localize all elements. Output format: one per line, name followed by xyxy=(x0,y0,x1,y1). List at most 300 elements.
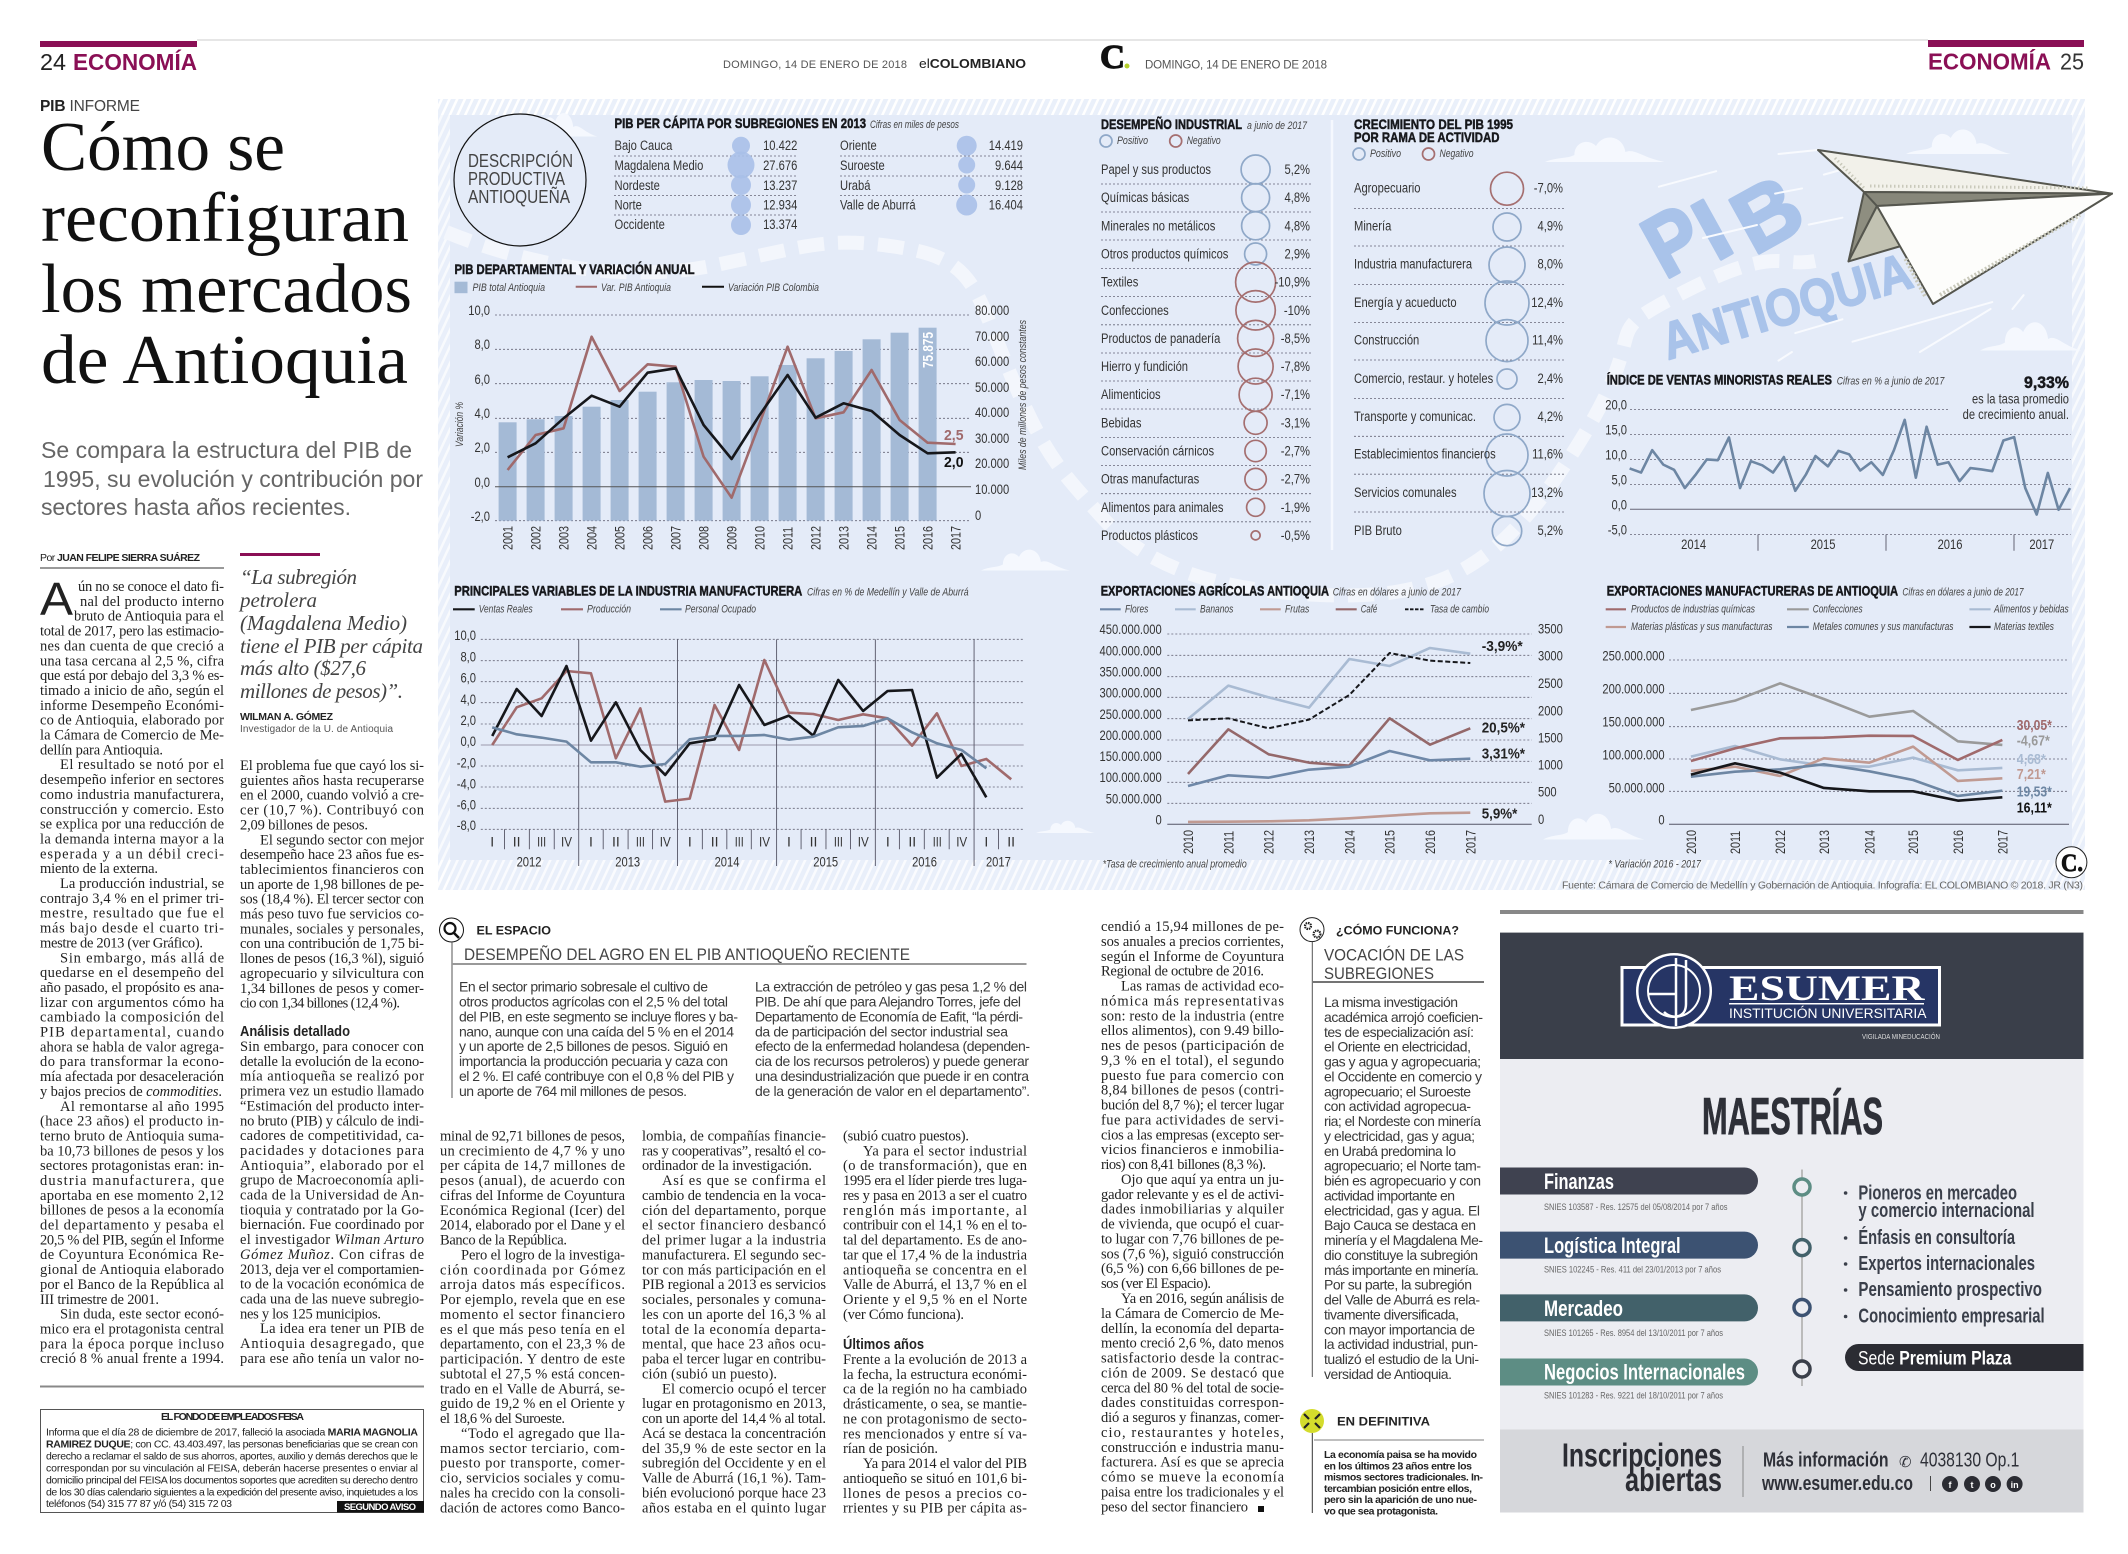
article column 2: cio con 1,34 billones (12,4 %). xyxy=(240,996,400,1012)
article column 2: con una contribución de 1,75 bi- xyxy=(240,936,424,952)
chart: Exportaciones manufactureras de Antioquia: Cifras en dólares a junio de 2017 xyxy=(1902,587,2024,599)
ad footer: 4038130 Op.1 xyxy=(1920,1450,2019,1472)
benefits list: Pioneros en mercadeo xyxy=(1858,1182,2017,1204)
chart: Exportaciones agrícolas Antioquia: Café xyxy=(1361,604,1377,616)
article column 5: Valle de Aburrá, el 13,7 % en el xyxy=(843,1277,1027,1293)
circle heading: Descripción productiva antioqueña: DESCRIPCIÓN xyxy=(468,150,573,171)
chart: Desempeño industrial: a junio de 2017 xyxy=(1247,120,1308,132)
chart: Principales variables de la industria manufacturera: 0,0 xyxy=(460,734,476,749)
chart: Crecimiento del PIB 1995 por rama de actividad: Negativo xyxy=(1440,148,1474,160)
article column 1: como industria manufacturera, xyxy=(40,787,224,803)
chart: Principales variables de la industria manufacturera: III xyxy=(735,834,744,850)
article column 2: 1,34 billones de pesos y comer- xyxy=(240,981,424,997)
section: El Espacio: efecto de la enfermedad holandesa (dependen- xyxy=(755,1038,1030,1054)
section: En definitiva: La economía paisa se ha movido xyxy=(1324,1449,1477,1461)
chart: Índice de ventas minoristas reales: 2017 xyxy=(2029,537,2054,552)
chart: Crecimiento del PIB 1995 por rama de actividad: 13,2% xyxy=(1531,485,1563,500)
article column 5: Oriente y el 9,5 % en el Norte xyxy=(843,1292,1027,1308)
section: El Espacio: importancia la producción pecuaria y caza con xyxy=(459,1053,728,1069)
chart: Exportaciones manufactureras de Antioquia: Materias plásticas y sus manufacturas xyxy=(1631,621,1773,633)
ad footer: in xyxy=(2011,1480,2019,1490)
chart: Exportaciones manufactureras de Antioquia: 16,11* xyxy=(2017,799,2052,816)
chart: Exportaciones agrícolas Antioquia: 2000 xyxy=(1538,703,1563,719)
article column 1: nal del producto interno xyxy=(80,594,224,610)
chart: Exportaciones agrícolas Antioquia: 400.000.000 xyxy=(1100,643,1162,659)
ad footer: Inscripciones xyxy=(1562,1436,1722,1474)
section: El Espacio xyxy=(440,918,1033,1099)
article column 6: mento creció 2,6 %, dato menos xyxy=(1101,1336,1284,1352)
chart: Desempeño industrial: -7,1% xyxy=(1281,387,1310,403)
article column 5 continued: llones de pesos a precios co- xyxy=(843,1486,1027,1502)
chart: PIB per cápita por subregiones: Nordeste xyxy=(614,178,660,193)
chart: Crecimiento del PIB 1995 por rama de actividad xyxy=(1353,116,1564,546)
circle heading: Descripción productiva antioqueña: ANTIOQUEÑA xyxy=(468,186,570,207)
article column 5 continued: ne con protagonismo de secto- xyxy=(843,1411,1027,1427)
article column 1: mía afectada por desaceleración xyxy=(40,1069,225,1085)
article column 1: PIB departamental, cuando xyxy=(40,1025,224,1041)
article column 3: Por ejemplo, revela que en ese xyxy=(440,1292,625,1308)
chart: Principales variables de la industria manufacturera: 2013 xyxy=(615,855,640,870)
chart: Crecimiento del PIB 1995 por rama de actividad: Energía y acueducto xyxy=(1354,295,1457,310)
chart: Desempeño industrial: -0,5% xyxy=(1281,528,1310,543)
chart: Crecimiento del PIB 1995 por rama de actividad: -7,0% xyxy=(1534,180,1563,196)
program pills: SNIES 102245 - Res. 411 del 23/01/2013 por 7 años xyxy=(1544,1265,1721,1276)
article column 3: “Todo el agregado que lla- xyxy=(461,1426,625,1442)
article column 5: Ya para el sector industrial xyxy=(863,1143,1027,1159)
section: Cómo funciona: y electricidad, gas y agua; xyxy=(1324,1128,1475,1144)
chart: Exportaciones manufactureras de Antioquia: 2011 xyxy=(1728,831,1743,854)
subheading: Se compara la estructura del PIB de xyxy=(41,437,412,463)
chart: Exportaciones manufactureras de Antioquia: 7,21* xyxy=(2017,766,2046,783)
article column 3: 2014, elaborado por el Dane y el xyxy=(440,1218,625,1234)
article column 4: cambio de tendencia en la voca- xyxy=(642,1188,826,1204)
byline: Por JUAN FELIPE SIERRA SUÁREZ xyxy=(40,551,201,564)
chart: Principales variables de la industria manufacturera: II xyxy=(612,834,620,850)
article column 5 continued: Ya para 2014 el valor del PIB xyxy=(863,1456,1027,1472)
chart: Exportaciones agrícolas Antioquia: 2016 xyxy=(1423,830,1438,854)
article column 1: ba 10,73 billones de pesos y los xyxy=(40,1143,224,1159)
section: El Espacio: otros productos agrícolas con el 2,5 % del total xyxy=(459,994,728,1010)
page header: left page: DOMINGO, 14 DE ENERO DE 2018 xyxy=(723,59,907,71)
article column 1: una tasa cercana al 2,5 %, cifra xyxy=(40,653,225,669)
chart: Desempeño industrial: -2,7% xyxy=(1281,443,1310,459)
chart: Exportaciones agrícolas Antioquia: 1500 xyxy=(1538,730,1563,746)
chart: PIB departamental y variación anual: 2010 xyxy=(752,526,768,550)
section: El Espacio: PIB. De ahí que para Alejandro Torres, jefe del xyxy=(755,994,1021,1010)
chart: Desempeño industrial: Alimenticios xyxy=(1101,387,1161,403)
chart: Crecimiento del PIB 1995 por rama de actividad: 12,4% xyxy=(1531,295,1563,310)
article column 3: puesto por transporte, comer- xyxy=(440,1456,625,1472)
chart: Exportaciones agrícolas Antioquia: 200.000.000 xyxy=(1100,728,1162,743)
chart: Exportaciones manufactureras de Antioquia: 250.000.000 xyxy=(1602,649,1665,664)
chart: PIB departamental y variación anual: 80.000 xyxy=(975,303,1009,318)
chart: Desempeño industrial: DESEMPEÑO INDUSTRIAL xyxy=(1101,115,1242,132)
chart: PIB per cápita por subregiones: Occidente xyxy=(614,217,665,232)
ad footer: Más información xyxy=(1763,1450,1888,1472)
article column 2: cer (10,7 %). Contribuyó con xyxy=(240,803,425,819)
chart: Crecimiento del PIB 1995 por rama de actividad: Establecimientos financieros xyxy=(1354,447,1496,462)
page header: right page: 25 xyxy=(2060,48,2084,74)
chart: Principales variables de la industria manufacturera: -2,0 xyxy=(457,755,476,771)
source credit: Fuente: Cámara de Comercio de Medellín y Gobernación de Antioquia. Infografía: EL COLOMBIANO © 2018. JR (N3) xyxy=(1562,879,2083,891)
section: El Espacio: cia de los recursos petroleros) y puede generar xyxy=(755,1053,1029,1069)
chart: Crecimiento del PIB 1995 por rama de actividad: Minería xyxy=(1354,218,1392,234)
article column 1: La producción industrial, se xyxy=(60,876,224,892)
chart: PIB departamental y variación anual: -2,0 xyxy=(471,509,490,524)
article column 2 continued: no bruto (PIB) y cálculo de indi- xyxy=(240,1113,424,1129)
article column 1: Al remontarse al año 1995 xyxy=(60,1099,224,1115)
chart: Exportaciones agrícolas Antioquia: 2012 xyxy=(1261,830,1277,854)
chart: Crecimiento del PIB 1995 por rama de actividad: 11,6% xyxy=(1532,447,1563,462)
article column 1: III trimestre de 2001. xyxy=(40,1292,159,1308)
article column 6: nes de pesos (participación de xyxy=(1101,1038,1284,1054)
chart: Exportaciones agrícolas Antioquia: Cifras en dólares a junio de 2017 xyxy=(1333,587,1462,599)
article column 6: Las ramas de actividad eco- xyxy=(1121,979,1284,995)
chart: PIB departamental y variación anual: 70.000 xyxy=(975,329,1009,344)
title xyxy=(41,109,412,399)
chart: PIB per cápita por subregiones: PIB PER CÁPITA POR SUBREGIONES EN 2013 xyxy=(614,115,866,131)
chart: Crecimiento del PIB 1995 por rama de actividad: Agropecuario xyxy=(1354,180,1421,196)
article column 5 continued: drásticamente, o sea, se mantie- xyxy=(843,1397,1027,1413)
title: Cómo se xyxy=(41,109,285,186)
chart: Crecimiento del PIB 1995 por rama de actividad: Construcción xyxy=(1354,333,1419,348)
article column 2 continued: cada una de las nueve subregio- xyxy=(240,1291,424,1307)
article column 1: total de 2017, pero las estimacio- xyxy=(40,624,224,640)
chart: Exportaciones manufactureras de Antioquia: 100.000.000 xyxy=(1602,747,1665,763)
chart: Desempeño industrial: -8,5% xyxy=(1281,331,1310,346)
chart: PIB departamental y variación anual: 2,5 xyxy=(944,427,964,444)
article column 6: nómica más representativas xyxy=(1101,993,1284,1009)
article column 1: creció 8 % anual frente a 1994. xyxy=(40,1351,224,1367)
chart: PIB per cápita por subregiones: 9.644 xyxy=(995,158,1023,173)
article column 2 continued: nes y los 125 municipios. xyxy=(240,1306,381,1322)
chart: Exportaciones manufactureras de Antioquia: 19,53* xyxy=(2017,784,2052,801)
article column 3: guido de 19,2 % en el Oriente y xyxy=(440,1396,626,1412)
chart: Desempeño industrial: Bebidas xyxy=(1101,415,1141,431)
section: El Espacio: La extracción de petróleo y gas pesa 1,2 % del xyxy=(755,979,1027,995)
title: de Antioquia xyxy=(41,322,408,399)
chart: PIB departamental y variación anual: 20.000 xyxy=(975,456,1009,471)
chart: Desempeño industrial: -10% xyxy=(1284,303,1310,318)
chart: PIB per cápita por subregiones: Valle de Aburrá xyxy=(840,197,916,213)
chart: Crecimiento del PIB 1995 por rama de actividad: 4,2% xyxy=(1538,409,1563,424)
chart: Desempeño industrial: 2,9% xyxy=(1285,246,1310,262)
article column 1: terno bruto de Antioquia suma- xyxy=(40,1128,224,1144)
article column 4: mental, que hace 23 años ocu- xyxy=(642,1337,826,1353)
chart: PIB departamental y variación anual: 2012 xyxy=(808,526,824,550)
section: Cómo funciona: tivamente diversificada, xyxy=(1324,1306,1459,1322)
page header: right page xyxy=(1928,40,2084,74)
section: Cómo funciona: tes de especialización así: xyxy=(1324,1024,1474,1040)
section: Cómo funciona: más importante en minería. xyxy=(1324,1262,1479,1278)
chart: Principales variables de la industria manufacturera: 4,0 xyxy=(460,692,476,707)
icon: magnifier xyxy=(440,918,464,942)
article column 6: según el Informe de Coyuntura xyxy=(1101,949,1285,965)
chart: Desempeño industrial: -1,9% xyxy=(1281,500,1310,515)
article column 3: dación de actores como Banco- xyxy=(440,1500,625,1516)
chart: PIB departamental y variación anual: 6,0 xyxy=(474,372,490,387)
section: Cómo funciona: VOCACIÓN DE LAS xyxy=(1324,946,1464,965)
article column 1: contrajo 3,4 % en el primer tri- xyxy=(40,891,224,907)
logo: circular C stamp xyxy=(2056,847,2087,878)
chart: Exportaciones agrícolas Antioquia: 3500 xyxy=(1538,621,1563,637)
chart: Exportaciones agrícolas Antioquia: 0 xyxy=(1155,812,1162,828)
section: Cómo funciona: tualizó el estudio de la Uni- xyxy=(1324,1351,1479,1367)
section: Cómo funciona: el Occidente en comercio y xyxy=(1324,1068,1482,1084)
chart: PIB departamental y variación anual: Miles de millones de pesos constantes xyxy=(1017,320,1029,470)
chart: Principales variables de la industria manufacturera: 2,0 xyxy=(460,713,476,728)
pull quote: “La subregión xyxy=(240,565,357,589)
article column 3: pesos (anual), de acuerdo con xyxy=(440,1173,626,1189)
section: En definitiva: pero sin la aparición de uno nue- xyxy=(1324,1494,1478,1506)
chart: Índice de ventas minoristas reales: 2015 xyxy=(1811,537,1835,552)
subheading: Últimos años: Últimos años xyxy=(843,1335,924,1353)
article column 4: del primer lugar a la industria xyxy=(642,1233,827,1249)
section: En definitiva xyxy=(1300,1409,1484,1518)
article column 2: guientes años hasta recuperarse xyxy=(240,773,424,789)
article column 6: 8,84 billones de pesos (contri- xyxy=(1101,1083,1284,1099)
chart: Exportaciones agrícolas Antioquia: 350.000.000 xyxy=(1100,664,1162,680)
ad footer: abiertas xyxy=(1625,1461,1722,1498)
chart: Crecimiento del PIB 1995 por rama de actividad: 5,2% xyxy=(1538,523,1563,538)
chart: PIB departamental y variación anual: 2001 xyxy=(500,526,516,550)
chart: PIB departamental y variación anual: 2009 xyxy=(724,526,740,550)
article column 5: contribuir con el 14,1 % en el to- xyxy=(843,1218,1027,1234)
chart: Desempeño industrial: -3,1% xyxy=(1281,415,1310,431)
article column 2 continued: to de la vocación económica de xyxy=(240,1277,424,1293)
chart: PIB departamental y variación anual: 10.000 xyxy=(975,482,1009,497)
chart: PIB departamental y variación anual: PIB total Antioquia xyxy=(472,282,545,294)
article column 4: sociales, personales y comuna- xyxy=(642,1292,826,1308)
chart: Índice de ventas minoristas reales: 9,33% xyxy=(2024,373,2069,392)
section: El Espacio: una desindustrialización que puede ir en contra xyxy=(755,1068,1029,1084)
section: El Espacio: el 2 %. El café contribuye con el 0,8 % del PIB y xyxy=(459,1068,734,1084)
chart: Exportaciones manufactureras de Antioquia: 30,05* xyxy=(2017,717,2052,734)
chart: PIB per cápita por subregiones: 12.934 xyxy=(763,197,797,213)
campus bar: Sede Premium Plaza xyxy=(1858,1349,2012,1370)
article column 3: Pero el logro de la investiga- xyxy=(461,1247,625,1263)
article column 3: Económica Regional (Icer) del xyxy=(440,1203,625,1219)
chart: Exportaciones manufactureras de Antioquia: Productos de industrias químicas xyxy=(1631,604,1755,616)
chart: Principales variables de la industria manufacturera: I xyxy=(688,834,692,850)
article column 3: Banco de la República. xyxy=(440,1233,567,1249)
program pills: Mercadeo xyxy=(1544,1296,1623,1321)
article column 5 continued: rrientes y su PIB per cápita as- xyxy=(843,1501,1027,1517)
article column 4: les con un aporte del 16,3 % al xyxy=(642,1307,826,1323)
article column 2 continued: detalle la evolución de la econo- xyxy=(240,1054,424,1070)
notice: Fondo de empleados FEISA: teléfonos (54) 315 77 87 y/ó (54) 315 72 03 xyxy=(46,1498,232,1510)
chart: Exportaciones agrícolas Antioquia: 1000 xyxy=(1538,757,1563,773)
chart: Exportaciones agrícolas Antioquia: 2010 xyxy=(1181,830,1196,854)
chart: Principales variables de la industria manufacturera: PRINCIPALES VARIABLES DE LA INDUSTRIA MANUFACTURERA xyxy=(454,583,802,599)
article column 2 continued: primera vez un estudio llamado xyxy=(240,1084,424,1100)
section: Cómo funciona: electricidad, gas y agua. El xyxy=(1324,1202,1480,1218)
chart: Desempeño industrial: 5,2% xyxy=(1285,162,1310,177)
page header: right page: ECONOMÍA xyxy=(1928,48,2051,74)
chart: Índice de ventas minoristas reales xyxy=(1605,372,2071,552)
title: reconfiguran xyxy=(41,180,409,257)
chart: Exportaciones agrícolas Antioquia: 50.000.000 xyxy=(1106,791,1162,807)
article column 1: aportaba en ese momento 2,12 xyxy=(40,1188,224,1204)
notice: Fondo de empleados FEISA: correspondan por su vinculación al FEISA, deberán hacerse presentes o enviar al xyxy=(46,1463,418,1475)
chart: PIB departamental y variación anual xyxy=(454,260,1029,550)
article column 2: en el 2000, cuando volvió a cre- xyxy=(240,788,424,804)
chart: PIB per cápita por subregiones: 10.422 xyxy=(763,138,797,153)
article column 6: sos (ver El Espacio). xyxy=(1101,1276,1211,1292)
article column 2 continued: Antioquia desagregado, que xyxy=(240,1336,424,1352)
article column 4: subregión del Occidente y en el xyxy=(642,1456,826,1472)
illustration: PIB Antioquia wordmark and streaks: ANTIOQUIA xyxy=(1655,243,1919,372)
article column 4: Así es que se confirma el xyxy=(662,1173,826,1189)
article column 5 continued: ca de la región no ha cambiado xyxy=(843,1382,1027,1398)
pull quote: (Magdalena Medio) xyxy=(240,611,407,635)
article column 5 continued: la fecha, la estructura económi- xyxy=(843,1367,1027,1383)
article column 5: renglón más importante, al xyxy=(843,1203,1027,1219)
pull quote: tiene el PIB per cápita xyxy=(240,634,423,658)
article column 1: sectores protagonistas eran: in- xyxy=(40,1158,224,1174)
chart: Desempeño industrial: Productos de panadería xyxy=(1101,331,1221,346)
circle heading: Descripción productiva antioqueña: PRODUCTIVA xyxy=(468,169,565,189)
article column 6: fue para actividades de servi- xyxy=(1101,1112,1284,1128)
chart: Desempeño industrial: Alimentos para animales xyxy=(1101,500,1223,515)
chart: Exportaciones agrícolas Antioquia xyxy=(1100,583,1563,870)
chart: Exportaciones agrícolas Antioquia: Bananos xyxy=(1200,604,1234,616)
article column 1: nes dan cuenta de que creció a xyxy=(40,638,225,654)
program pills: Finanzas xyxy=(1544,1169,1614,1194)
article column 4: ción del departamento, porque xyxy=(642,1203,826,1219)
article column 4: del 35,9 % de este sector en la xyxy=(642,1441,827,1457)
article column 6: gador relevante y es el de activi- xyxy=(1101,1187,1284,1203)
chart: PIB per cápita por subregiones xyxy=(614,115,1023,235)
chart: Desempeño industrial: Conservación cárnicos xyxy=(1101,443,1214,459)
section: Cómo funciona: minería y el Magdalena Me- xyxy=(1324,1232,1483,1248)
article column 6: peso del sector financiero xyxy=(1101,1499,1248,1515)
article column 3: momento el sector financiero xyxy=(440,1307,625,1323)
section: Cómo funciona: la actividad industrial, pun- xyxy=(1324,1336,1478,1352)
chart: PIB departamental y variación anual: 2008 xyxy=(696,526,712,550)
chart: PIB departamental y variación anual: 2005 xyxy=(612,526,628,550)
chart: Índice de ventas minoristas reales: es la tasa promedio xyxy=(1972,391,2069,407)
chart: Exportaciones manufactureras de Antioquia: Confecciones xyxy=(1813,604,1863,616)
chart: Índice de ventas minoristas reales: 15,0 xyxy=(1605,422,1627,438)
chart: Exportaciones manufactureras de Antioquia: 4,68* xyxy=(2017,751,2046,768)
chart: Principales variables de la industria manufacturera: I xyxy=(490,834,494,850)
chart: Principales variables de la industria manufacturera: 2012 xyxy=(517,855,541,870)
chart: Exportaciones agrícolas Antioquia: 2014 xyxy=(1342,830,1358,854)
article column 6: dades constituidas correspon- xyxy=(1101,1395,1284,1411)
program pills xyxy=(1500,1168,1758,1402)
chart: PIB departamental y variación anual: 60.000 xyxy=(975,354,1009,369)
section: Cómo funciona: versidad de Antioquia. xyxy=(1324,1366,1452,1382)
chart: Desempeño industrial: -7,8% xyxy=(1281,359,1310,374)
chart: PIB departamental y variación anual: 2015 xyxy=(892,526,908,550)
chart: PIB departamental y variación anual: 0 xyxy=(975,508,981,523)
chart: Exportaciones agrícolas Antioquia: -3,9%* xyxy=(1482,638,1523,655)
chart: PIB per cápita por subregiones: Suroeste xyxy=(840,158,885,173)
chart: Principales variables de la industria manufacturera: 2015 xyxy=(813,855,838,870)
notice: Fondo de empleados FEISA: derecho a reclamar el saldo de sus ahorros, aportes, auxilio y demás derechos que le xyxy=(46,1451,418,1463)
chart: Desempeño industrial: Minerales no metálicos xyxy=(1101,218,1215,234)
section: En definitiva: EN DEFINITIVA xyxy=(1337,1416,1430,1428)
article column 3: ción coordinada por Gómez xyxy=(440,1262,626,1278)
chart: Exportaciones agrícolas Antioquia: 250.000.000 xyxy=(1100,707,1162,722)
section: Cómo funciona: en Urabá predomina lo xyxy=(1324,1143,1456,1159)
article column 4: manufacturera. El segundo sec- xyxy=(642,1247,826,1263)
chart: Principales variables de la industria manufacturera: II xyxy=(711,834,719,850)
chart: Desempeño industrial: Químicas básicas xyxy=(1101,190,1189,206)
article column 3: el 18,6 % del Suroeste. xyxy=(440,1411,565,1427)
advertisement: ESUMER xyxy=(1500,910,2084,1512)
pull quote: más alto ($27,6 xyxy=(240,656,366,680)
article column 1: la demanda interna mayor a la xyxy=(40,831,225,847)
chart: PIB departamental y variación anual: 4,0 xyxy=(474,406,490,421)
article column 1: mestre de 2013 (ver Gráfico). xyxy=(40,935,203,951)
notice: Fondo de empleados FEISA xyxy=(40,1386,424,1513)
program pills: Negocios Internacionales xyxy=(1544,1359,1745,1384)
article column 4: ras y cooperativas”, resaltó el co- xyxy=(642,1143,826,1159)
article column 1: timado a inicio de año, según el xyxy=(40,683,224,699)
benefits list: Pensamiento prospectivo xyxy=(1858,1279,2042,1301)
section: En definitiva: tercambian posición entre ellos, xyxy=(1324,1483,1472,1495)
chart: Exportaciones agrícolas Antioquia: 300.000.000 xyxy=(1100,686,1162,701)
chart: Crecimiento del PIB 1995 por rama de actividad: 4,9% xyxy=(1538,218,1563,234)
article column 6: cios a las empresas (excepto ser- xyxy=(1101,1127,1284,1143)
article column 3: cio, servicios sociales y comu- xyxy=(440,1471,625,1487)
chart: PIB per cápita por subregiones: 16.404 xyxy=(989,197,1023,213)
article column 2 continued: grupo de Macroeconomía apli- xyxy=(240,1173,424,1189)
article column 5: (subió cuatro puestos). xyxy=(843,1128,969,1144)
program pills: Logística Integral xyxy=(1544,1233,1681,1258)
article column 1: para la época porque incluso xyxy=(40,1336,224,1352)
article column 6: Ojo que aquí ya entra un ju- xyxy=(1121,1172,1284,1188)
chart: PIB departamental y variación anual: 2011 xyxy=(780,527,796,550)
article column 1: Sin duda, este sector econó- xyxy=(60,1307,224,1323)
article column 6: dellín, la economía del departa- xyxy=(1101,1321,1284,1337)
article column 1: esperada y a un débil creci- xyxy=(40,846,224,862)
chart: Exportaciones manufactureras de Antioquia: 150.000.000 xyxy=(1602,715,1665,730)
article column 1: Sin embargo, más allá de xyxy=(60,950,224,966)
chart: Desempeño industrial: Textiles xyxy=(1101,274,1138,290)
chart: Exportaciones manufactureras de Antioquia: 2015 xyxy=(1906,830,1921,854)
chart: Exportaciones agrícolas Antioquia: 5,9%* xyxy=(1482,805,1517,822)
chart: PIB per cápita por subregiones: Oriente xyxy=(840,138,877,153)
section: El Espacio: DESEMPEÑO DEL AGRO EN EL PIB ANTIOQUEÑO RECIENTE xyxy=(464,945,910,964)
timeline xyxy=(1794,1170,1810,1386)
article column 4: ción (subió un puesto). xyxy=(642,1366,777,1382)
pull quote: millones de pesos)”. xyxy=(240,679,403,703)
article column 3: nales ha crecido con la consoli- xyxy=(440,1485,625,1501)
chart: PIB per cápita por subregiones: Cifras en miles de pesos xyxy=(870,119,959,131)
article column 2 continued: para ese año tenía un valor no- xyxy=(240,1351,424,1367)
article column 1: desempeño inferior en sectores xyxy=(40,772,224,788)
logo: circular C stamp: C. xyxy=(2061,850,2083,877)
section: Cómo funciona: La misma investigación xyxy=(1324,994,1458,1010)
chart: Crecimiento del PIB 1995 por rama de actividad: POR RAMA DE ACTIVIDAD xyxy=(1354,129,1500,145)
section: Cómo funciona: académica arrojó coeficien- xyxy=(1324,1009,1483,1025)
illustration: PIB Antioquia wordmark and streaks: B xyxy=(1715,155,1819,273)
chart: Principales variables de la industria manufacturera: 2014 xyxy=(715,855,739,870)
pull quote: WILMAN A. GÓMEZ xyxy=(240,710,334,723)
article column 1: (hace 23 años) el producto in- xyxy=(40,1114,224,1130)
chart: Principales variables de la industria manufacturera: -8,0 xyxy=(457,818,476,833)
chart: Índice de ventas minoristas reales: de crecimiento anual. xyxy=(1963,406,2069,422)
chart: PIB departamental y variación anual: 2017 xyxy=(948,526,964,550)
chart: Crecimiento del PIB 1995 por rama de actividad: 8,0% xyxy=(1538,256,1563,272)
article column 3: arroja datos más específicos. xyxy=(440,1277,625,1293)
notice: Fondo de empleados FEISA: de los 30 días calendario siguientes a la expedición del presente aviso, inquietudes a los xyxy=(46,1486,418,1498)
article column 6: Regional de octubre de 2016. xyxy=(1101,964,1264,980)
article column 2 continued: “Estimación del producto inter- xyxy=(240,1098,424,1114)
